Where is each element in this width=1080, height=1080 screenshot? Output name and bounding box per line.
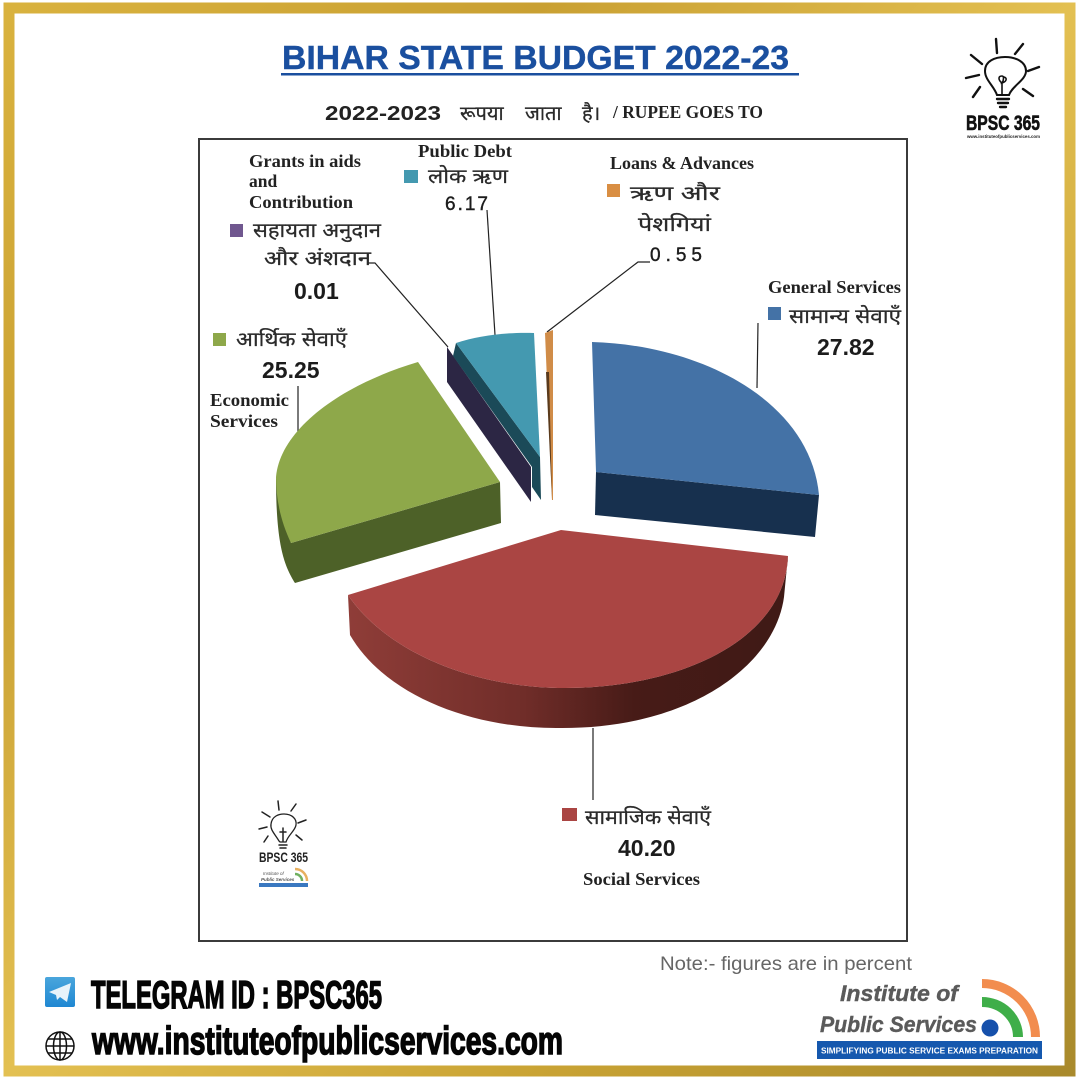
label: Public Debt [404, 141, 512, 215]
note: Note:- figures are in percent [660, 953, 913, 975]
leader lines [298, 210, 758, 800]
slice: Grants in aids [447, 347, 531, 502]
panel: pie chart frame [199, 139, 907, 941]
banner [817, 1041, 1042, 1059]
label: Social Services: Social Services [583, 869, 700, 889]
label: Grants in aids [230, 151, 382, 304]
slice: General Services [592, 342, 819, 537]
label: Loans and Advances: ऋण और [630, 181, 721, 205]
telegram id: TELEGRAM ID : BPSC365 [91, 974, 382, 1017]
orange arc [982, 984, 1036, 1037]
label: Grants in aids: सहायता अनुदान [253, 220, 382, 243]
pie chart [276, 330, 819, 728]
label: Social Services: सामाजिक सेवाएँ [585, 805, 712, 829]
title: BIHAR STATE BUDGET 2022-23 [282, 39, 789, 76]
label: Economic Services: 25.25 [262, 357, 320, 383]
label: Loans and Advances [607, 153, 754, 266]
label: Grants in aids: Grants in aids [249, 151, 361, 171]
label: Social Services: 40.20 [618, 835, 676, 861]
label: General Services: सामान्य सेवाएँ [789, 304, 902, 328]
logo wordmark: BPSC 365 [966, 112, 1040, 135]
label: Grants in aids: and [249, 171, 277, 191]
subtitle: है। [582, 100, 600, 125]
slice: Economic Services [276, 362, 501, 583]
label: General Services: General Services [768, 277, 901, 297]
icon: light bulb [966, 39, 1039, 107]
subtitle: रूपया [460, 103, 504, 125]
logo: BPSC 365 bulb [966, 39, 1040, 139]
logo: small BPSC 365 watermark: BPSC 365 [259, 849, 308, 865]
label: Grants in aids: 0.01 [294, 278, 339, 304]
subtitle: / RUPEE GOES TO [612, 102, 763, 122]
logo: Institute of Public Services: Institute of [840, 981, 961, 1006]
label: General Services: 27.82 [817, 334, 875, 360]
logo: Institute of Public Services [817, 981, 1042, 1059]
label: Loans and Advances: पेशगियां [638, 212, 712, 236]
label: Public Debt: Public Debt [418, 141, 512, 161]
label: Economic Services [210, 327, 348, 431]
website: www.instituteofpublicservices.com [91, 1020, 563, 1063]
subtitle [325, 100, 763, 125]
slice: Loans and Advances [545, 330, 553, 500]
icon: globe [46, 1032, 74, 1060]
label: Public Debt: 6.17 [445, 194, 488, 215]
label: Economic Services: आर्थिक सेवाएँ [236, 327, 348, 351]
logo: Institute of Public Services: Public Services [820, 1012, 977, 1037]
logo: small BPSC 365 watermark: Public Services [261, 877, 295, 882]
slice: Public Debt [453, 333, 541, 500]
banner: SIMPLIFYING PUBLIC SERVICE EXAMS PREPARATION [821, 1046, 1038, 1056]
label: Loans and Advances: 0.55 [650, 245, 702, 266]
label: Loans and Advances: Loans & Advances [610, 153, 754, 173]
label: Economic Services: Services [210, 411, 278, 431]
logo: BPSC 365 bulb: www.instituteofpublicservices.com [966, 134, 1040, 139]
label: Public Debt: लोक ऋण [428, 164, 509, 188]
subtitle: 2022-2023 [325, 103, 441, 125]
logo: small BPSC 365 watermark: Institute of [263, 871, 285, 876]
label: Grants in aids: और अंशदान [264, 246, 372, 270]
green arc [982, 1002, 1018, 1037]
label: General Services [768, 277, 902, 360]
label: Grants in aids: Contribution [249, 192, 353, 212]
icon: telegram [45, 977, 75, 1007]
blue dot [982, 1020, 998, 1036]
slice: Social Services [348, 530, 788, 728]
label: Social Services [562, 805, 712, 889]
logo: small BPSC 365 watermark [259, 801, 308, 887]
label: Economic Services: Economic [210, 390, 289, 410]
subtitle: जाता [525, 103, 562, 125]
